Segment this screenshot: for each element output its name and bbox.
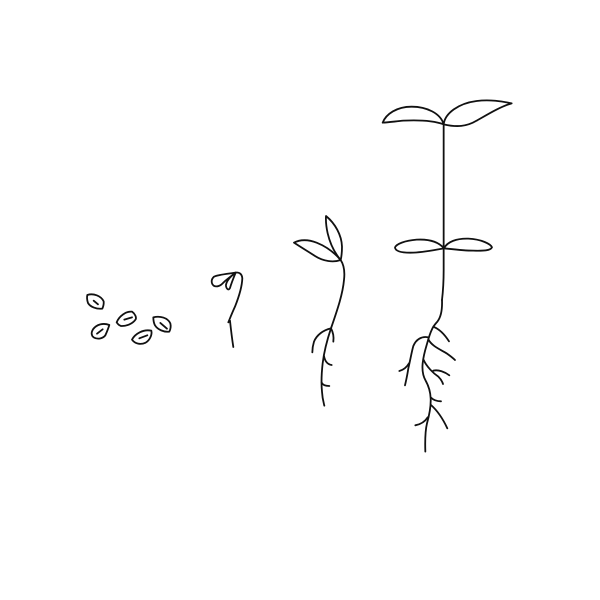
upper leaf	[326, 216, 342, 260]
top right leaf	[444, 100, 512, 126]
top left leaf	[383, 107, 444, 124]
stage 3: seedling with two leaves	[294, 216, 344, 406]
seed 3	[92, 324, 109, 339]
stage 4: mature seedling, roots	[399, 300, 455, 452]
lower right leaf	[444, 239, 492, 251]
left leaf	[294, 240, 341, 261]
root branches	[312, 328, 331, 352]
lower left leaf	[395, 240, 444, 253]
seed 2	[117, 312, 136, 326]
root branches	[433, 327, 449, 341]
stage 4: mature seedling, shoot	[383, 100, 512, 300]
seed 5	[132, 330, 152, 344]
stage 2: sprout with folded leaf	[212, 273, 242, 347]
stem and main root	[322, 260, 344, 406]
main root	[422, 300, 442, 452]
seed 4	[153, 317, 171, 332]
stage 1: seeds	[87, 294, 171, 344]
stem	[442, 124, 444, 300]
seed 1	[87, 294, 104, 309]
